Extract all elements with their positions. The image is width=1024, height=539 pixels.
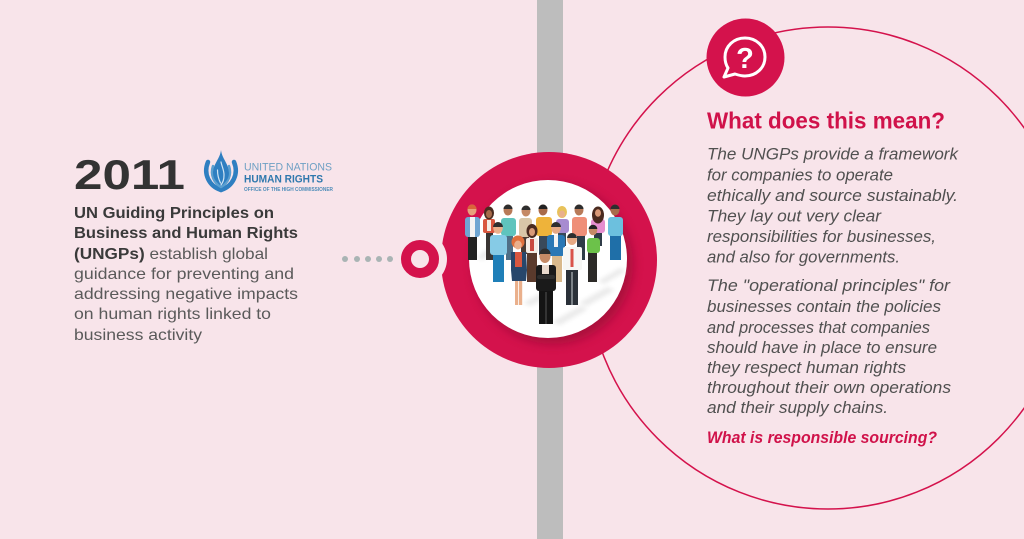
person 1 (465, 204, 480, 260)
large outline circle (587, 27, 1024, 509)
white circle (469, 180, 627, 338)
paragraph 1: responsibilities for businesses, (707, 228, 936, 246)
person 11 (526, 224, 538, 282)
icon: question speech bubble: ? (736, 43, 754, 75)
central red circle with people (393, 152, 657, 368)
paragraph 1: for companies to operate (707, 166, 893, 184)
description text: on human rights linked to (74, 306, 271, 323)
paragraph 1: They lay out very clear (707, 208, 883, 226)
year heading: 2011 (74, 151, 185, 198)
paragraph 2 (707, 277, 952, 417)
paragraph 1: and also for governments. (707, 248, 900, 266)
logo: UN Human Rights: HUMAN RIGHTS (244, 174, 323, 186)
heading: What does this mean? (707, 108, 945, 134)
description text: addressing negative impacts (74, 286, 298, 303)
description text: Business and Human Rights (74, 225, 298, 242)
logo: UN Human Rights (206, 150, 333, 193)
person 7 (572, 204, 587, 260)
person 13 (587, 225, 600, 282)
description text: (UNGPs) establish global (74, 246, 268, 263)
person 6 (556, 206, 569, 246)
panel: year and description (74, 150, 333, 344)
person 5 (536, 204, 552, 255)
link text: What is responsible sourcing? (707, 429, 937, 447)
paragraph 2: throughout their own operations (707, 379, 951, 397)
person 9 (608, 204, 623, 260)
logo text: UNITED NATIONS (244, 162, 332, 174)
small ring marker (406, 245, 434, 273)
paragraph 2: should have in place to ensure (707, 339, 937, 357)
person 10 (490, 222, 507, 282)
paragraph 2: businesses contain the policies (707, 298, 941, 316)
description text: UN Guiding Principles on (74, 205, 274, 222)
person 14 (511, 236, 527, 305)
paragraph 2: they respect human rights (707, 359, 906, 377)
person 16 (536, 249, 556, 324)
floor shadows (477, 250, 626, 325)
description text: guidance for preventing and (74, 266, 294, 283)
paragraph 1 (707, 146, 959, 266)
paragraph 2: and their supply chains. (707, 399, 888, 417)
description text (74, 205, 298, 344)
icon: question speech bubble (706, 18, 784, 96)
person 8 (591, 206, 605, 246)
paragraph 1: The UNGPs provide a framework (707, 146, 959, 164)
person 12 (547, 222, 565, 282)
panel: what does this mean (707, 108, 959, 447)
paragraph 2: The "operational principles" for (707, 277, 952, 295)
person 3 (501, 204, 516, 260)
person 15 (563, 233, 582, 305)
connector dots (342, 256, 393, 262)
description text: business activity (74, 327, 202, 344)
icon: wreath and flame (206, 150, 236, 190)
white circle shadow (473, 184, 633, 344)
people group (465, 204, 623, 324)
person 4 (519, 206, 532, 254)
person 2 (483, 206, 495, 260)
paragraph 1: ethically and source sustainably. (707, 187, 958, 205)
paragraph 2: and processes that companies (707, 319, 930, 337)
notch (393, 232, 447, 286)
logo: UN Human Rights: OFFICE OF THE HIGH COMMISSIONER (244, 187, 333, 193)
vertical timeline bar (537, 0, 563, 539)
red ring (441, 152, 657, 368)
